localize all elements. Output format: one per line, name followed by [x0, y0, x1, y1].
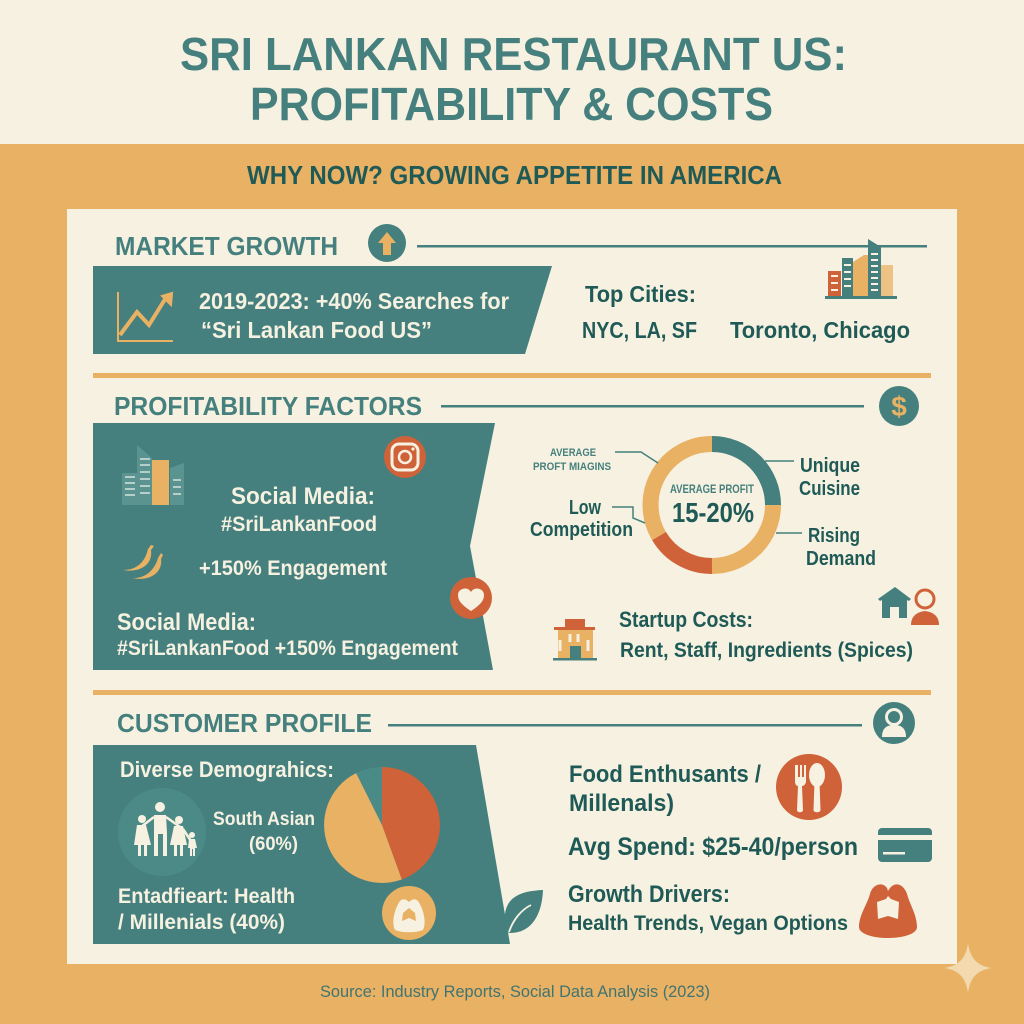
donut label: average profit margins	[533, 447, 658, 473]
donut label: average profit margins: AVERAGE	[550, 447, 596, 459]
banner: social media: +150% Engagement	[199, 557, 387, 580]
section: profitability factors	[93, 386, 939, 670]
donut label: rising demand: Rising	[808, 525, 860, 547]
icon: city skyline	[825, 239, 897, 299]
icon: fork and spoon	[776, 754, 842, 820]
icon: chili peppers	[123, 545, 163, 579]
text: food enthusiasts: Food Enthusants /	[569, 761, 761, 788]
donut label: unique cuisine	[765, 455, 860, 500]
icon: flexed arms	[859, 884, 917, 938]
chart: demographics pie	[324, 767, 440, 883]
banner: social media: #SriLankanFood	[221, 513, 377, 536]
donut label: unique cuisine: Cuisine	[799, 478, 860, 500]
section: market growth	[93, 224, 927, 354]
icon: dollar: $	[891, 391, 907, 422]
icon: instagram	[384, 436, 426, 478]
banner: search growth	[93, 266, 552, 354]
text: top cities: Top Cities:	[585, 281, 696, 307]
decorative star	[944, 943, 992, 993]
heading: customer profile: CUSTOMER PROFILE	[117, 708, 372, 738]
donut label: average profit margins: PROFT MIAGINS	[533, 461, 611, 473]
icon: family	[118, 788, 206, 876]
heading: market growth: MARKET GROWTH	[115, 231, 338, 261]
header band with title: PROFITABILITY & COSTS	[250, 78, 773, 130]
banner: demographics	[93, 745, 510, 944]
text: average spend: Avg Spend: $25-40/person	[568, 833, 858, 861]
icon: leaf	[505, 890, 543, 933]
source note: Source: Industry Reports, Social Data Analysis (2023)	[320, 982, 710, 1001]
text: growth drivers	[568, 881, 848, 935]
icon: up arrow	[368, 224, 406, 262]
banner: demographics: / Millenials (40%)	[118, 911, 285, 934]
banner: demographics: Entadfieart: Health	[118, 885, 295, 908]
text: growth drivers: Health Trends, Vegan Options	[568, 912, 848, 935]
donut label: low competition: Competition	[530, 519, 633, 541]
text: growth drivers: Growth Drivers:	[568, 881, 730, 908]
donut label: rising demand	[776, 525, 876, 570]
icon: house	[878, 587, 911, 618]
header band with title: SRI LANKAN RESTAURANT US:	[180, 28, 847, 80]
donut label: rising demand: Demand	[806, 548, 876, 570]
chart: profit donut: 15-20%	[672, 497, 754, 528]
banner: social media: Social Media:	[117, 609, 256, 636]
text: top cities: NYC, LA, SF	[582, 317, 697, 343]
text: food enthusiasts: Millenals)	[569, 790, 674, 817]
donut label: low competition: Low	[569, 497, 601, 519]
text: startup costs	[619, 607, 913, 662]
header band with title	[0, 0, 1024, 144]
icon: user	[873, 702, 915, 744]
banner: demographics: South Asian	[213, 809, 315, 830]
chart: profit donut	[651, 444, 773, 566]
heading: profitability factors: PROFITABILITY FACTORS	[114, 391, 422, 421]
banner: demographics: (60%)	[249, 834, 298, 855]
text: top cities	[582, 281, 910, 343]
icon: dollar	[879, 386, 919, 426]
section: customer profile	[93, 702, 932, 944]
chart: profit donut: AVERAGE PROFIT	[670, 484, 754, 496]
text: startup costs: Startup Costs:	[619, 607, 753, 632]
banner: demographics: Diverse Demograhics:	[120, 757, 334, 782]
banner: search growth: “Sri Lankan Food US”	[201, 317, 432, 343]
banner: social media: #SriLankanFood +150% Engagement	[117, 637, 458, 660]
subheading: WHY NOW? GROWING APPETITE IN AMERICA	[247, 160, 782, 190]
text: top cities: Toronto, Chicago	[730, 317, 910, 343]
main content panel	[67, 209, 957, 964]
banner: search growth: 2019-2023: +40% Searches for	[199, 288, 509, 314]
banner: social media: Social Media:	[231, 483, 375, 510]
icon: credit card	[878, 828, 932, 862]
icon: heart	[450, 577, 492, 619]
icon: restaurant building	[553, 619, 597, 660]
donut label: unique cuisine: Unique	[800, 455, 860, 477]
text: startup costs: Rent, Staff, Ingredients (Spices)	[620, 639, 913, 662]
banner: social media	[93, 423, 495, 670]
icon: growth chart	[118, 292, 173, 341]
text: food enthusiasts	[569, 761, 761, 817]
icon: buildings	[122, 445, 184, 505]
icon: muscle badge	[382, 886, 436, 940]
donut label: low competition	[530, 497, 645, 541]
icon: person	[911, 590, 939, 625]
